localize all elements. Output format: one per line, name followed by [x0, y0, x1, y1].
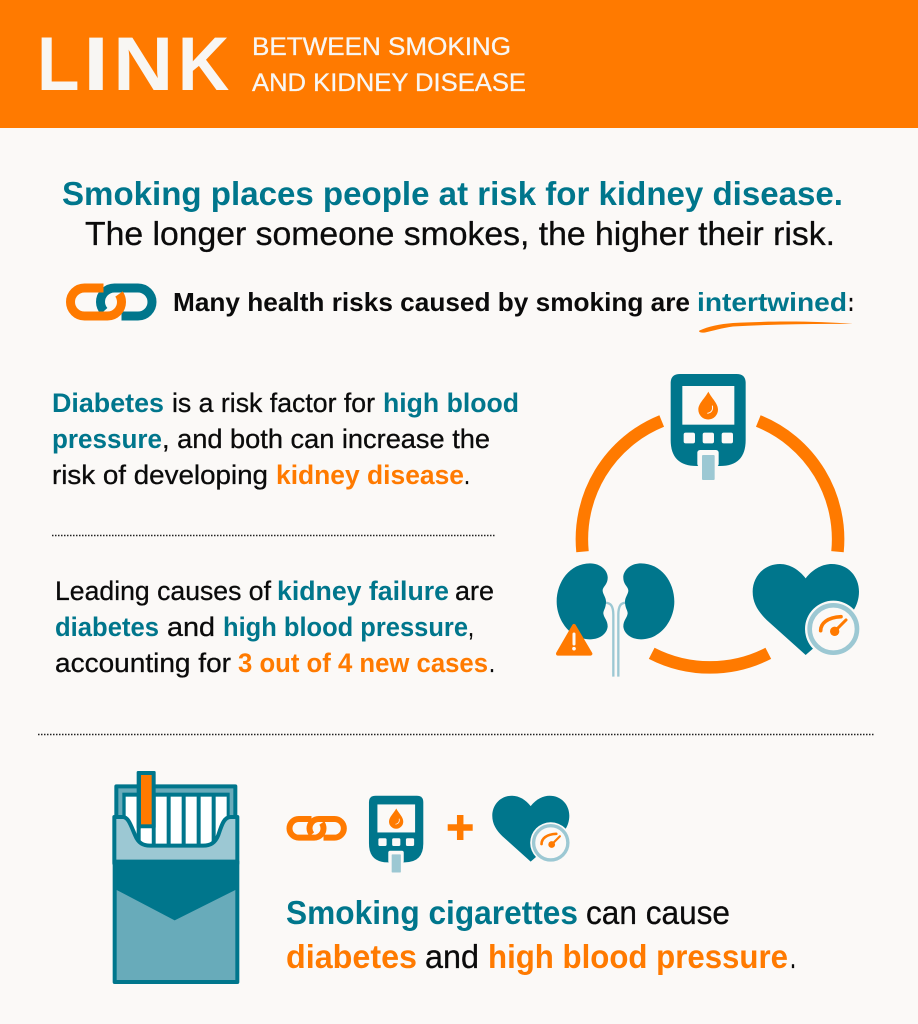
intertwined statement: [173, 287, 854, 333]
subtitle: [252, 33, 526, 97]
text block: smoking cigarettes conclusion: [286, 894, 796, 975]
text block: diabetes risk factor: Diabetes: [52, 388, 164, 418]
text block: diabetes risk factor: high blood: [383, 388, 519, 418]
text block: leading causes of kidney failure: 3 out of 4 new cases: [238, 648, 488, 678]
header banner: [0, 0, 918, 128]
intertwined statement: Many health risks caused by smoking are: [173, 287, 690, 317]
text block: smoking cigarettes conclusion: and: [425, 938, 479, 975]
icon: cigarette pack: [114, 771, 237, 982]
icon: chain: [290, 819, 344, 838]
icon: small heart with gauge: [492, 796, 571, 863]
equation icons: [290, 796, 571, 873]
text block: leading causes of kidney failure: .: [489, 648, 495, 678]
text block: smoking cigarettes conclusion: .: [790, 938, 796, 975]
title: LINK: [37, 22, 230, 107]
underline swoosh: [699, 322, 853, 333]
text block: diabetes risk factor: risk of developing: [52, 460, 268, 490]
headline statement: The longer someone smokes, the higher their risk.: [85, 215, 835, 252]
cigarettes: [126, 797, 227, 845]
icon: interlinked chain: [71, 288, 152, 316]
pack front: [114, 817, 237, 863]
text block: smoking cigarettes conclusion: high blood pressure: [488, 938, 788, 975]
text block: leading causes of kidney failure: ,: [468, 612, 474, 642]
title: LINK: N: [113, 22, 173, 107]
text block: leading causes of kidney failure: kidney failure: [277, 576, 449, 606]
headline statement: [62, 175, 843, 252]
subtitle: AND KIDNEY DISEASE: [252, 69, 526, 97]
text block: leading causes of kidney failure: accounting for: [55, 648, 231, 678]
pack back: [116, 786, 235, 826]
text block: leading causes of kidney failure: and: [167, 612, 215, 642]
headline statement: Smoking places people at risk for kidney disease.: [62, 175, 843, 212]
text block: leading causes of kidney failure: high blood pressure: [223, 612, 468, 642]
title: LINK: I: [83, 22, 109, 107]
icon: glucose meter: [671, 374, 746, 480]
intertwined statement: :: [848, 287, 854, 317]
text block: leading causes of kidney failure: are: [455, 576, 494, 606]
icon: plus: [448, 815, 473, 840]
title: LINK: K: [178, 22, 230, 107]
subtitle: BETWEEN SMOKING: [252, 33, 511, 61]
text block: smoking cigarettes conclusion: diabetes: [286, 938, 417, 975]
text block: diabetes risk factor: kidney disease: [276, 460, 464, 490]
text block: diabetes risk factor: pressure: [52, 424, 162, 454]
text block: diabetes risk factor: , and both can increase the: [162, 424, 490, 454]
cycle arrows ring: [582, 421, 838, 667]
icon: heart with pressure gauge: [753, 564, 862, 657]
text block: smoking cigarettes conclusion: can cause: [586, 894, 730, 931]
icon: kidneys with warning: [557, 563, 674, 677]
text block: diabetes risk factor: [52, 388, 519, 490]
text block: diabetes risk factor: is a risk factor for: [172, 388, 375, 418]
text block: diabetes risk factor: .: [464, 460, 470, 490]
text block: leading causes of kidney failure: diabetes: [55, 612, 159, 642]
text block: leading causes of kidney failure: Leading causes of: [55, 576, 271, 606]
icon: small glucose meter: [369, 796, 423, 873]
title: LINK: L: [37, 22, 80, 107]
diagram: risk cycle: [557, 374, 862, 677]
text block: smoking cigarettes conclusion: Smoking cigarettes: [286, 894, 578, 931]
text block: leading causes of kidney failure: [55, 576, 495, 678]
intertwined statement: intertwined: [697, 287, 847, 317]
